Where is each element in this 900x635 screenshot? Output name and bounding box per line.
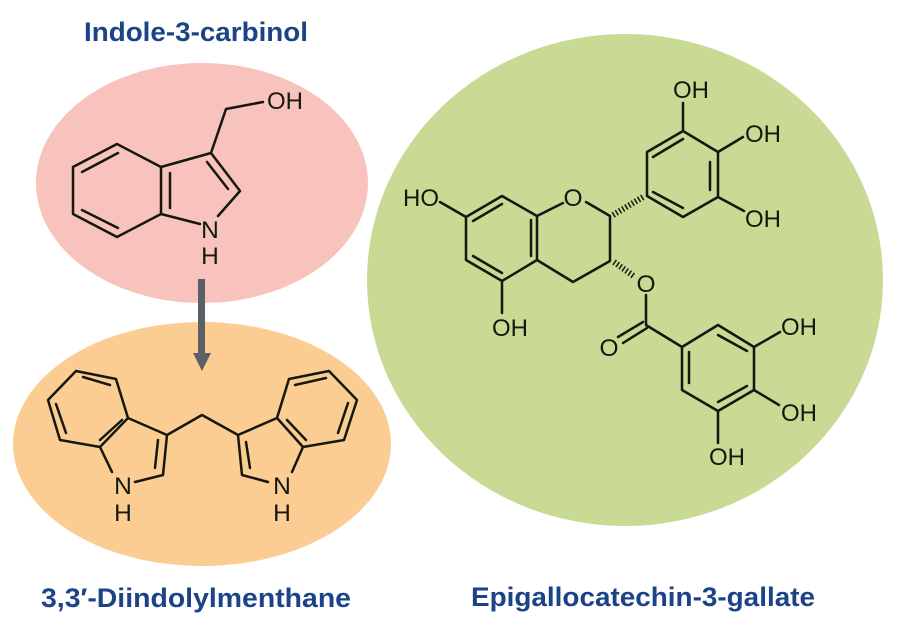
molecule: epigallocatechin-3-gallate: OH xyxy=(673,77,709,104)
title: Epigallocatechin-3-gallate: Epigallocatechin-3-gallate xyxy=(471,582,815,612)
title: Indole-3-carbinol: Indole-3-carbinol xyxy=(84,17,308,47)
molecule: indole-3-carbinol xyxy=(73,88,303,270)
molecule: epigallocatechin-3-gallate xyxy=(403,77,817,471)
panel: indole-3-carbinol ellipse xyxy=(36,63,368,303)
title: 3,3'-Diindolylmenthane: 3,3′-Diindolylmenthane xyxy=(41,583,351,613)
molecule: diindolylmethane: H xyxy=(114,500,132,527)
molecule: diindolylmethane: H xyxy=(273,500,291,527)
molecule: indole-3-carbinol: H xyxy=(201,243,219,270)
molecule: diindolylmethane xyxy=(48,371,357,527)
molecule: epigallocatechin-3-gallate: O xyxy=(599,335,619,362)
molecule: epigallocatechin-3-gallate: HO xyxy=(403,185,439,212)
molecule: epigallocatechin-3-gallate: OH xyxy=(492,315,528,342)
molecule: diindolylmethane: N xyxy=(273,473,291,500)
molecule: epigallocatechin-3-gallate: OH xyxy=(781,314,817,341)
molecule: indole-3-carbinol: OH xyxy=(267,88,303,115)
molecule: indole-3-carbinol: N xyxy=(201,217,219,244)
molecule: diindolylmethane: N xyxy=(114,473,132,500)
molecule: epigallocatechin-3-gallate: OH xyxy=(709,444,745,471)
arrow: conversion xyxy=(193,279,211,371)
molecule: epigallocatechin-3-gallate: O xyxy=(563,185,583,212)
molecule: epigallocatechin-3-gallate: OH xyxy=(745,121,781,148)
molecule: epigallocatechin-3-gallate: O xyxy=(636,271,656,298)
panel: diindolylmethane ellipse xyxy=(13,322,391,566)
molecule: epigallocatechin-3-gallate: OH xyxy=(781,400,817,427)
panel: EGCG circle xyxy=(367,34,883,526)
molecule: epigallocatechin-3-gallate: OH xyxy=(745,206,781,233)
